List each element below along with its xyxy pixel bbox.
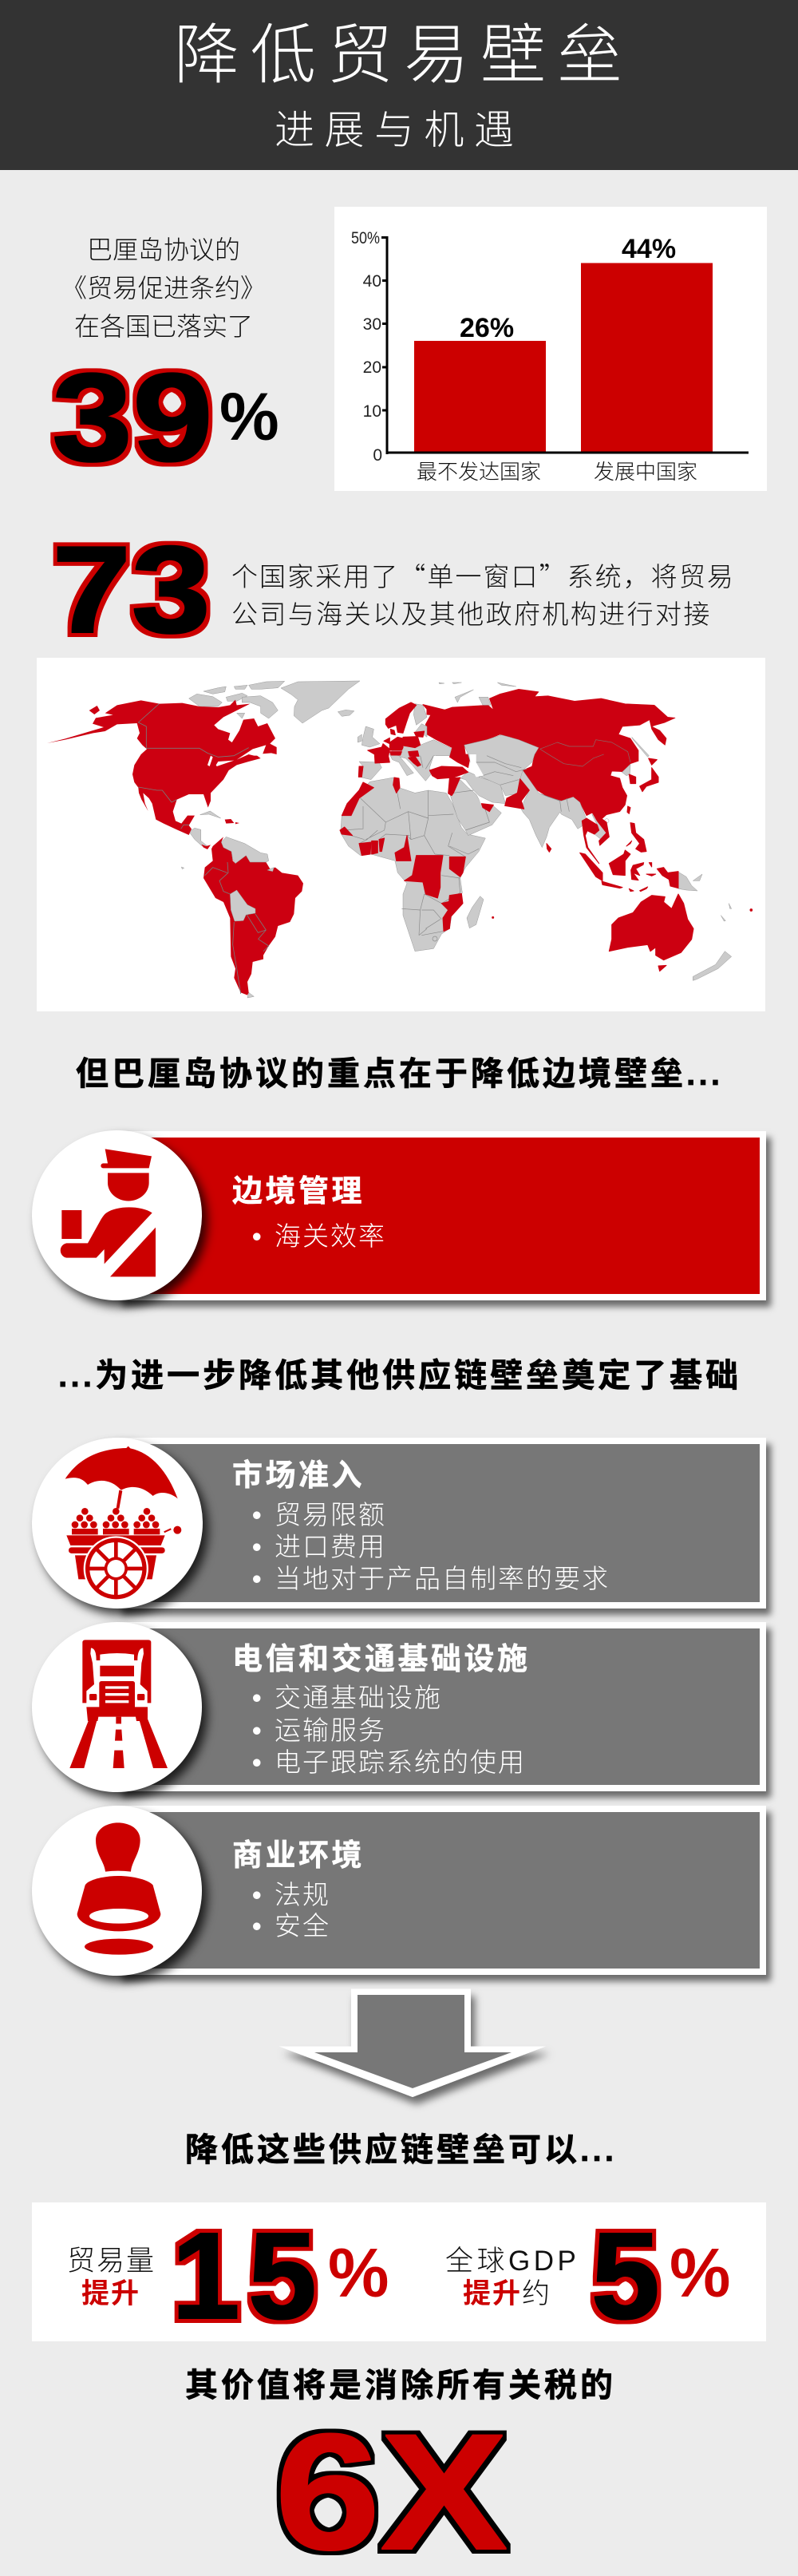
bullets: •: [252, 1532, 262, 1561]
bullets: •: [252, 1880, 262, 1909]
arrow: down: [279, 1989, 549, 2109]
stat: 15 percent: %: [328, 2235, 389, 2312]
title: 降低贸易壁垒: [174, 19, 634, 92]
axis labels: 30: [363, 315, 381, 334]
stat: 73: 73: [52, 520, 211, 659]
bullets: 安全: [275, 1911, 330, 1941]
bullets: •: [252, 1500, 262, 1529]
panel heading: 商业环境: [232, 1839, 365, 1873]
map: Asia Pacific: [505, 737, 753, 980]
value labels: 44%: [622, 234, 676, 264]
stat: 15 percent: 1: [172, 2207, 240, 2345]
panel box: [117, 1438, 766, 1609]
icon: market cart: [65, 1446, 182, 1600]
panel: telecom and transport infrastructure: [30, 1620, 776, 1806]
bullet: 海关效率: [275, 1221, 386, 1251]
heading: reducing barriers could: 降低这些供应链壁垒可以...: [185, 2131, 617, 2168]
bullets: [252, 1683, 526, 1777]
bullets: [252, 1880, 330, 1941]
bullets: 当地对于产品自制率的要求: [275, 1564, 610, 1593]
map: Russia and China: [425, 689, 675, 820]
label: raise about: 提升约: [463, 2278, 551, 2309]
panel heading: 边境管理: [232, 1175, 365, 1209]
stat: 39 percent: [50, 348, 279, 488]
heading: value equals: 其价值将是消除所有关税的: [185, 2367, 616, 2404]
bar: least developed countries: [414, 341, 546, 453]
text: Bali agreement implementation: [61, 235, 266, 341]
bullets: 贸易限额: [275, 1500, 386, 1529]
stat: 5 percent: 5: [591, 2207, 660, 2345]
bullets: •: [252, 1747, 262, 1777]
water: [429, 754, 484, 805]
world map: [37, 658, 765, 1011]
stat: 39 percent: 39: [52, 348, 213, 488]
text: single window: [231, 556, 735, 629]
panel heading: 市场准入: [232, 1459, 365, 1493]
text: Bali agreement implementation: 《贸易促进条约》: [61, 274, 266, 303]
bullets: •: [252, 1911, 262, 1941]
circle: [32, 1622, 202, 1792]
label: global GDP: 全球GDP: [445, 2246, 579, 2277]
axis labels: 20: [363, 358, 381, 377]
icon: truck on road: [69, 1640, 168, 1768]
label: raise: 提升: [81, 2278, 140, 2309]
axis labels: 10: [363, 402, 381, 421]
bullets: •: [252, 1564, 262, 1593]
bar chart: [334, 207, 767, 491]
map: South America: [203, 837, 303, 995]
panel: border management: [30, 1129, 776, 1315]
panel: business environment: [30, 1804, 776, 1990]
stat: 15 percent: [172, 2207, 389, 2345]
circle: [32, 1438, 203, 1609]
category labels: 发展中国家: [594, 460, 697, 484]
header banner: [0, 0, 798, 170]
bullets: 电子跟踪系统的使用: [275, 1747, 526, 1777]
panel: gains: [32, 2202, 766, 2341]
bullets: 进口费用: [275, 1532, 386, 1561]
circle: [32, 1806, 202, 1976]
value labels: [460, 234, 676, 343]
bullets: 运输服务: [275, 1715, 386, 1745]
panel box: [117, 1806, 766, 1975]
category labels: [417, 460, 697, 484]
bullets: [252, 1500, 610, 1593]
bullets: 交通基础设施: [275, 1683, 442, 1712]
category labels: 最不发达国家: [417, 460, 541, 484]
map: Americas: [47, 681, 360, 998]
label: trade volume: 贸易量: [67, 2246, 156, 2277]
bar: developing countries: [581, 263, 713, 453]
axis labels: 0: [373, 446, 382, 465]
map: North America: [47, 700, 277, 835]
stat: 5 percent: %: [670, 2235, 730, 2312]
bullets: 法规: [275, 1880, 330, 1909]
axis labels: 50%: [351, 229, 380, 247]
subtitle: 进展与机遇: [275, 108, 523, 152]
bullets: •: [252, 1715, 262, 1745]
panel: market access: [30, 1436, 776, 1622]
axis labels: 40: [363, 272, 381, 291]
text: Bali agreement implementation: 在各国已落实了: [74, 312, 253, 341]
panel box: [117, 1622, 766, 1791]
stat: 5 percent: [591, 2207, 730, 2345]
text: single window: 公司与海关以及其他政府机构进行对接: [231, 599, 712, 629]
icon: rubber stamp: [77, 1822, 161, 1955]
panel heading: 电信和交通基础设施: [232, 1643, 531, 1676]
map: Africa, Middle East and Europe: [338, 683, 539, 952]
circle: [32, 1130, 202, 1300]
value labels: 26%: [460, 313, 514, 343]
bullets: •: [252, 1683, 262, 1712]
red countries: [340, 702, 494, 932]
panel box: [117, 1131, 766, 1300]
stat: 15 percent: 5: [248, 2207, 317, 2345]
heading: Bali focus: 但巴厘岛协议的重点在于降低边境壁垒...: [76, 1055, 723, 1092]
text: single window: 个国家采用了“单一窗口”系统，将贸易: [231, 556, 735, 594]
heading: further barriers: ...为进一步降低其他供应链壁垒奠定了基础: [58, 1357, 741, 1394]
axis labels: [351, 229, 382, 465]
text: Bali agreement implementation: 巴厘岛协议的: [87, 235, 240, 264]
stat: 39 percent: %: [219, 379, 279, 454]
icon: customs officer: [61, 1149, 156, 1277]
bullet: •: [252, 1221, 262, 1251]
